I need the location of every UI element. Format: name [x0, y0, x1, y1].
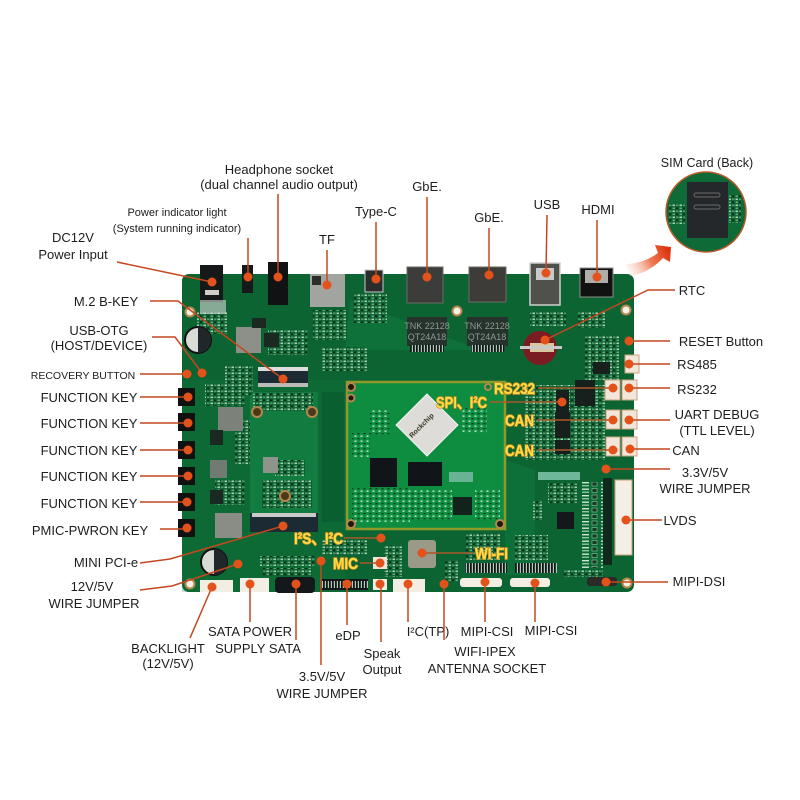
- callout: 3.5V/5V jumper: [276, 556, 368, 701]
- callout: MIPI-CSI 2: MIPI-CSI: [525, 623, 577, 638]
- callout: TF: TF: [319, 232, 335, 247]
- callout: M.2 B-KEY: M.2 B-KEY: [74, 294, 138, 309]
- callout: Type-C: Type-C: [355, 204, 397, 219]
- board: carrier PCB: [178, 262, 639, 593]
- ethernet transformers: QT24A18: [408, 332, 446, 342]
- callout: headphone socket: (dual channel audio output): [200, 177, 358, 192]
- callout: SATA: [215, 580, 301, 656]
- callout: headphone socket: Headphone socket: [225, 162, 334, 177]
- callout: I2C TP: [404, 580, 449, 639]
- callout: SATA: SUPPLY SATA: [215, 641, 301, 656]
- callout: function key 3: [41, 443, 192, 458]
- callout: RS485: RS485: [677, 357, 717, 372]
- callout: MIPI-DSI: MIPI-DSI: [673, 574, 725, 589]
- callout: RTC: [540, 283, 705, 344]
- callout: 3.3V/5V jumper: WIRE JUMPER: [660, 481, 750, 496]
- callout: SATA power: SATA POWER: [208, 624, 292, 639]
- callout: SATA power: [208, 580, 292, 639]
- PCB base: [182, 274, 634, 592]
- interface chips: [555, 362, 610, 454]
- callout: TF: [319, 232, 335, 290]
- callout: function key 5: FUNCTION KEY: [41, 496, 138, 511]
- callout: 3.5V/5V jumper: 3.5V/5V: [299, 669, 345, 684]
- ethernet transformers: QT24A18: [468, 332, 506, 342]
- callout: GbE 1: [412, 179, 442, 282]
- callout: USB-OTG: [51, 323, 206, 378]
- callout: headphone socket: [200, 162, 358, 282]
- RTC battery: [520, 331, 562, 365]
- on-board labels: [294, 381, 618, 573]
- callout: 3.5V/5V jumper: WIRE JUMPER: [276, 686, 368, 701]
- top connectors: [200, 262, 613, 307]
- callout: I2C TP: I²C(TP): [407, 624, 449, 639]
- callout: UART debug: UART DEBUG: [675, 407, 759, 422]
- callout: USB-OTG: (HOST/DEVICE): [51, 338, 147, 353]
- callout: MIPI-CSI 1: [461, 578, 513, 639]
- M.2 and PCIe slots: [250, 367, 318, 532]
- label: WI-FI: [418, 546, 508, 563]
- ethernet transformers: TNK 22128: [404, 321, 450, 331]
- inductors and capacitors: [185, 300, 279, 575]
- SIM card inset: [661, 156, 753, 252]
- lighter copper zones: [182, 300, 535, 592]
- callout: GbE 1: GbE.: [412, 179, 442, 194]
- bottom connectors: [200, 557, 617, 593]
- callout: LVDS: LVDS: [664, 513, 697, 528]
- callout: DC12V: [38, 230, 216, 286]
- label: RS232: [494, 381, 618, 398]
- callout: 3.3V/5V jumper: [602, 464, 750, 496]
- callout: MIPI-CSI 1: MIPI-CSI: [461, 624, 513, 639]
- callout: CAN: CAN: [672, 443, 700, 458]
- callout: eDP: eDP: [335, 628, 361, 643]
- callout: RS232: [624, 382, 717, 397]
- SIM side parts: [669, 195, 741, 224]
- callout: RS485: [624, 357, 717, 372]
- callout: speak output: Output: [362, 662, 402, 677]
- callout: USB: USB: [534, 197, 560, 212]
- callout: RESET button: RESET Button: [679, 334, 763, 349]
- SIM slots: [694, 193, 720, 209]
- label: CAN upper: [505, 413, 618, 430]
- callout: function key 1: FUNCTION KEY: [41, 390, 138, 405]
- callout: HDMI: HDMI: [581, 202, 615, 217]
- callout: power indicator: (System running indicator): [113, 223, 241, 235]
- label: MIC: [333, 556, 384, 573]
- callout: function key 4: FUNCTION KEY: [41, 469, 138, 484]
- callout: DC12V: DC12V: [52, 230, 94, 245]
- core module: [347, 382, 505, 529]
- label: CAN lower: [505, 443, 618, 460]
- callout: backlight: BACKLIGHT: [131, 641, 205, 656]
- callout: UART debug: [624, 407, 759, 438]
- callout: function key 5: [41, 496, 192, 511]
- callout: GbE 2: GbE.: [474, 210, 504, 225]
- callout: M.2 B-KEY: [74, 294, 288, 384]
- label: RS232: RS232: [494, 381, 535, 398]
- callout: WiFi IPEX: [428, 580, 546, 676]
- callout: eDP: [335, 580, 361, 643]
- callout: 3.3V/5V jumper: 3.3V/5V: [682, 465, 728, 480]
- ethernet transformers: [404, 317, 510, 352]
- ethernet transformers: TNK 22128: [464, 321, 510, 331]
- callout: MINI PCI-e: [74, 522, 288, 570]
- callout: recovery button: RECOVERY BUTTON: [31, 370, 135, 382]
- label: SPI I2C: SPI、I²C: [436, 395, 487, 412]
- callout: RTC: RTC: [679, 283, 705, 298]
- callout: WiFi IPEX: ANTENNA SOCKET: [428, 661, 546, 676]
- callout: function key 1: [41, 390, 192, 405]
- callout: GbE 2: [474, 210, 504, 280]
- callout: speak output: Speak: [364, 646, 401, 661]
- callout: function key 3: FUNCTION KEY: [41, 443, 138, 458]
- callout: PMIC-PWRON key: PMIC-PWRON KEY: [32, 523, 148, 538]
- callout: WiFi IPEX: WIFI-IPEX: [454, 644, 516, 659]
- callout: recovery button: [31, 370, 192, 382]
- small component fields: [197, 293, 620, 582]
- callout: Type-C: [355, 204, 397, 284]
- callout: LVDS: [622, 513, 697, 528]
- core module: Rockchip: [408, 412, 436, 440]
- callout: 12V/5V jumper: 12V/5V: [71, 579, 114, 594]
- right connectors: [605, 355, 639, 555]
- callout: USB-OTG: USB-OTG: [69, 323, 129, 338]
- callout: speak output: [362, 580, 402, 677]
- SoC diamond: [396, 394, 458, 456]
- callout: MIPI-DSI: [602, 574, 725, 589]
- circular board crop: [666, 172, 746, 252]
- callout: power indicator: Power indicator light: [127, 207, 227, 219]
- label: CAN lower: CAN: [505, 443, 534, 460]
- callout: MINI PCI-e: MINI PCI-e: [74, 555, 138, 570]
- callout: backlight: (12V/5V): [142, 656, 194, 671]
- callout: 12V/5V jumper: WIRE JUMPER: [48, 596, 140, 611]
- side buttons: [178, 388, 195, 537]
- CSI sockets, WiFi module, LVDS driver: [322, 478, 612, 588]
- mounting holes: [186, 306, 632, 588]
- callout: 12V/5V jumper: [48, 560, 242, 611]
- callout: RS232: RS232: [677, 382, 717, 397]
- red curved arrow: [626, 245, 671, 276]
- callout: function key 2: [41, 416, 192, 431]
- callout: power indicator: [113, 207, 252, 282]
- label: MIC: MIC: [333, 556, 358, 573]
- callout: function key 4: [41, 469, 192, 484]
- label: I2S I2C: I²S、I²C: [294, 531, 343, 548]
- SIM title: SIM Card (Back): [661, 156, 753, 170]
- callout: DC12V: Power Input: [38, 247, 108, 262]
- label: CAN upper: CAN: [505, 413, 534, 430]
- callout: MIPI-CSI 2: [525, 578, 577, 638]
- callout: CAN: [626, 443, 700, 458]
- label: WI-FI: WI-FI: [475, 546, 508, 563]
- callout: USB: [534, 197, 560, 278]
- callout: backlight: [131, 582, 216, 671]
- label: I2S I2C: [294, 531, 386, 548]
- callout: function key 2: FUNCTION KEY: [41, 416, 138, 431]
- label: SPI I2C: [436, 395, 566, 412]
- callout: RESET button: [624, 334, 763, 349]
- SIM socket: [687, 182, 728, 238]
- callout: HDMI: [581, 202, 615, 282]
- callout: UART debug: (TTL LEVEL): [679, 423, 755, 438]
